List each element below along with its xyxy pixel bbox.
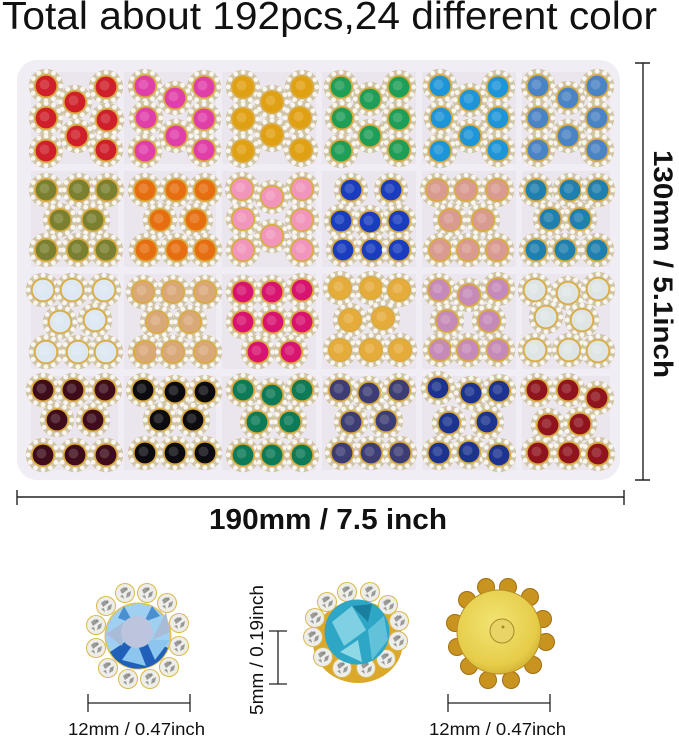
gems: topaz bbox=[226, 70, 319, 168]
gems: indigo bbox=[323, 373, 417, 470]
gems: sapphire bbox=[521, 69, 614, 167]
gems: fuchsia bbox=[226, 273, 319, 369]
gems: champagne bbox=[126, 275, 222, 369]
arrow: front width bracket bbox=[88, 694, 190, 712]
gems: garnet bbox=[520, 373, 615, 471]
gems: jet black bbox=[126, 373, 222, 470]
gems: peach pink bbox=[420, 173, 514, 267]
gems: teal blue bbox=[519, 173, 615, 267]
gems: dark burgundy bbox=[26, 373, 123, 472]
gems: rose bbox=[128, 69, 221, 168]
gems: royal blue bbox=[324, 173, 416, 267]
icon: front view of single rhinestone button bbox=[86, 583, 189, 689]
tray height label: 130mm / 5.1inch bbox=[648, 150, 678, 378]
gems: green bbox=[324, 70, 416, 168]
gems: amber bbox=[323, 271, 417, 367]
gems: olive bbox=[29, 173, 124, 267]
gems: pale aquamarine bbox=[26, 273, 123, 369]
arrow: thickness bracket bbox=[269, 631, 287, 684]
tray width label: 190mm / 7.5 inch bbox=[209, 504, 447, 536]
arrow: back width bracket bbox=[448, 694, 550, 712]
gems: red bbox=[29, 69, 124, 168]
gems: clear crystal bbox=[518, 272, 615, 368]
icon: angled view of single rhinestone button bbox=[303, 582, 409, 683]
thickness label: 5mm / 0.19inch bbox=[247, 585, 267, 715]
gems: light rose bbox=[225, 172, 319, 267]
gems: navy bbox=[421, 371, 516, 472]
arrow: tray width dimension line bbox=[17, 490, 624, 505]
gems: emerald bbox=[226, 373, 319, 472]
gems: orange bbox=[128, 173, 222, 267]
panel: storage tray with 24 colours bbox=[17, 60, 620, 480]
gems: sky blue bbox=[423, 69, 515, 168]
arrow: tray height dimension line bbox=[635, 63, 650, 480]
icon: back view of single rhinestone button bbox=[446, 578, 554, 688]
gems: lilac bbox=[422, 272, 515, 367]
